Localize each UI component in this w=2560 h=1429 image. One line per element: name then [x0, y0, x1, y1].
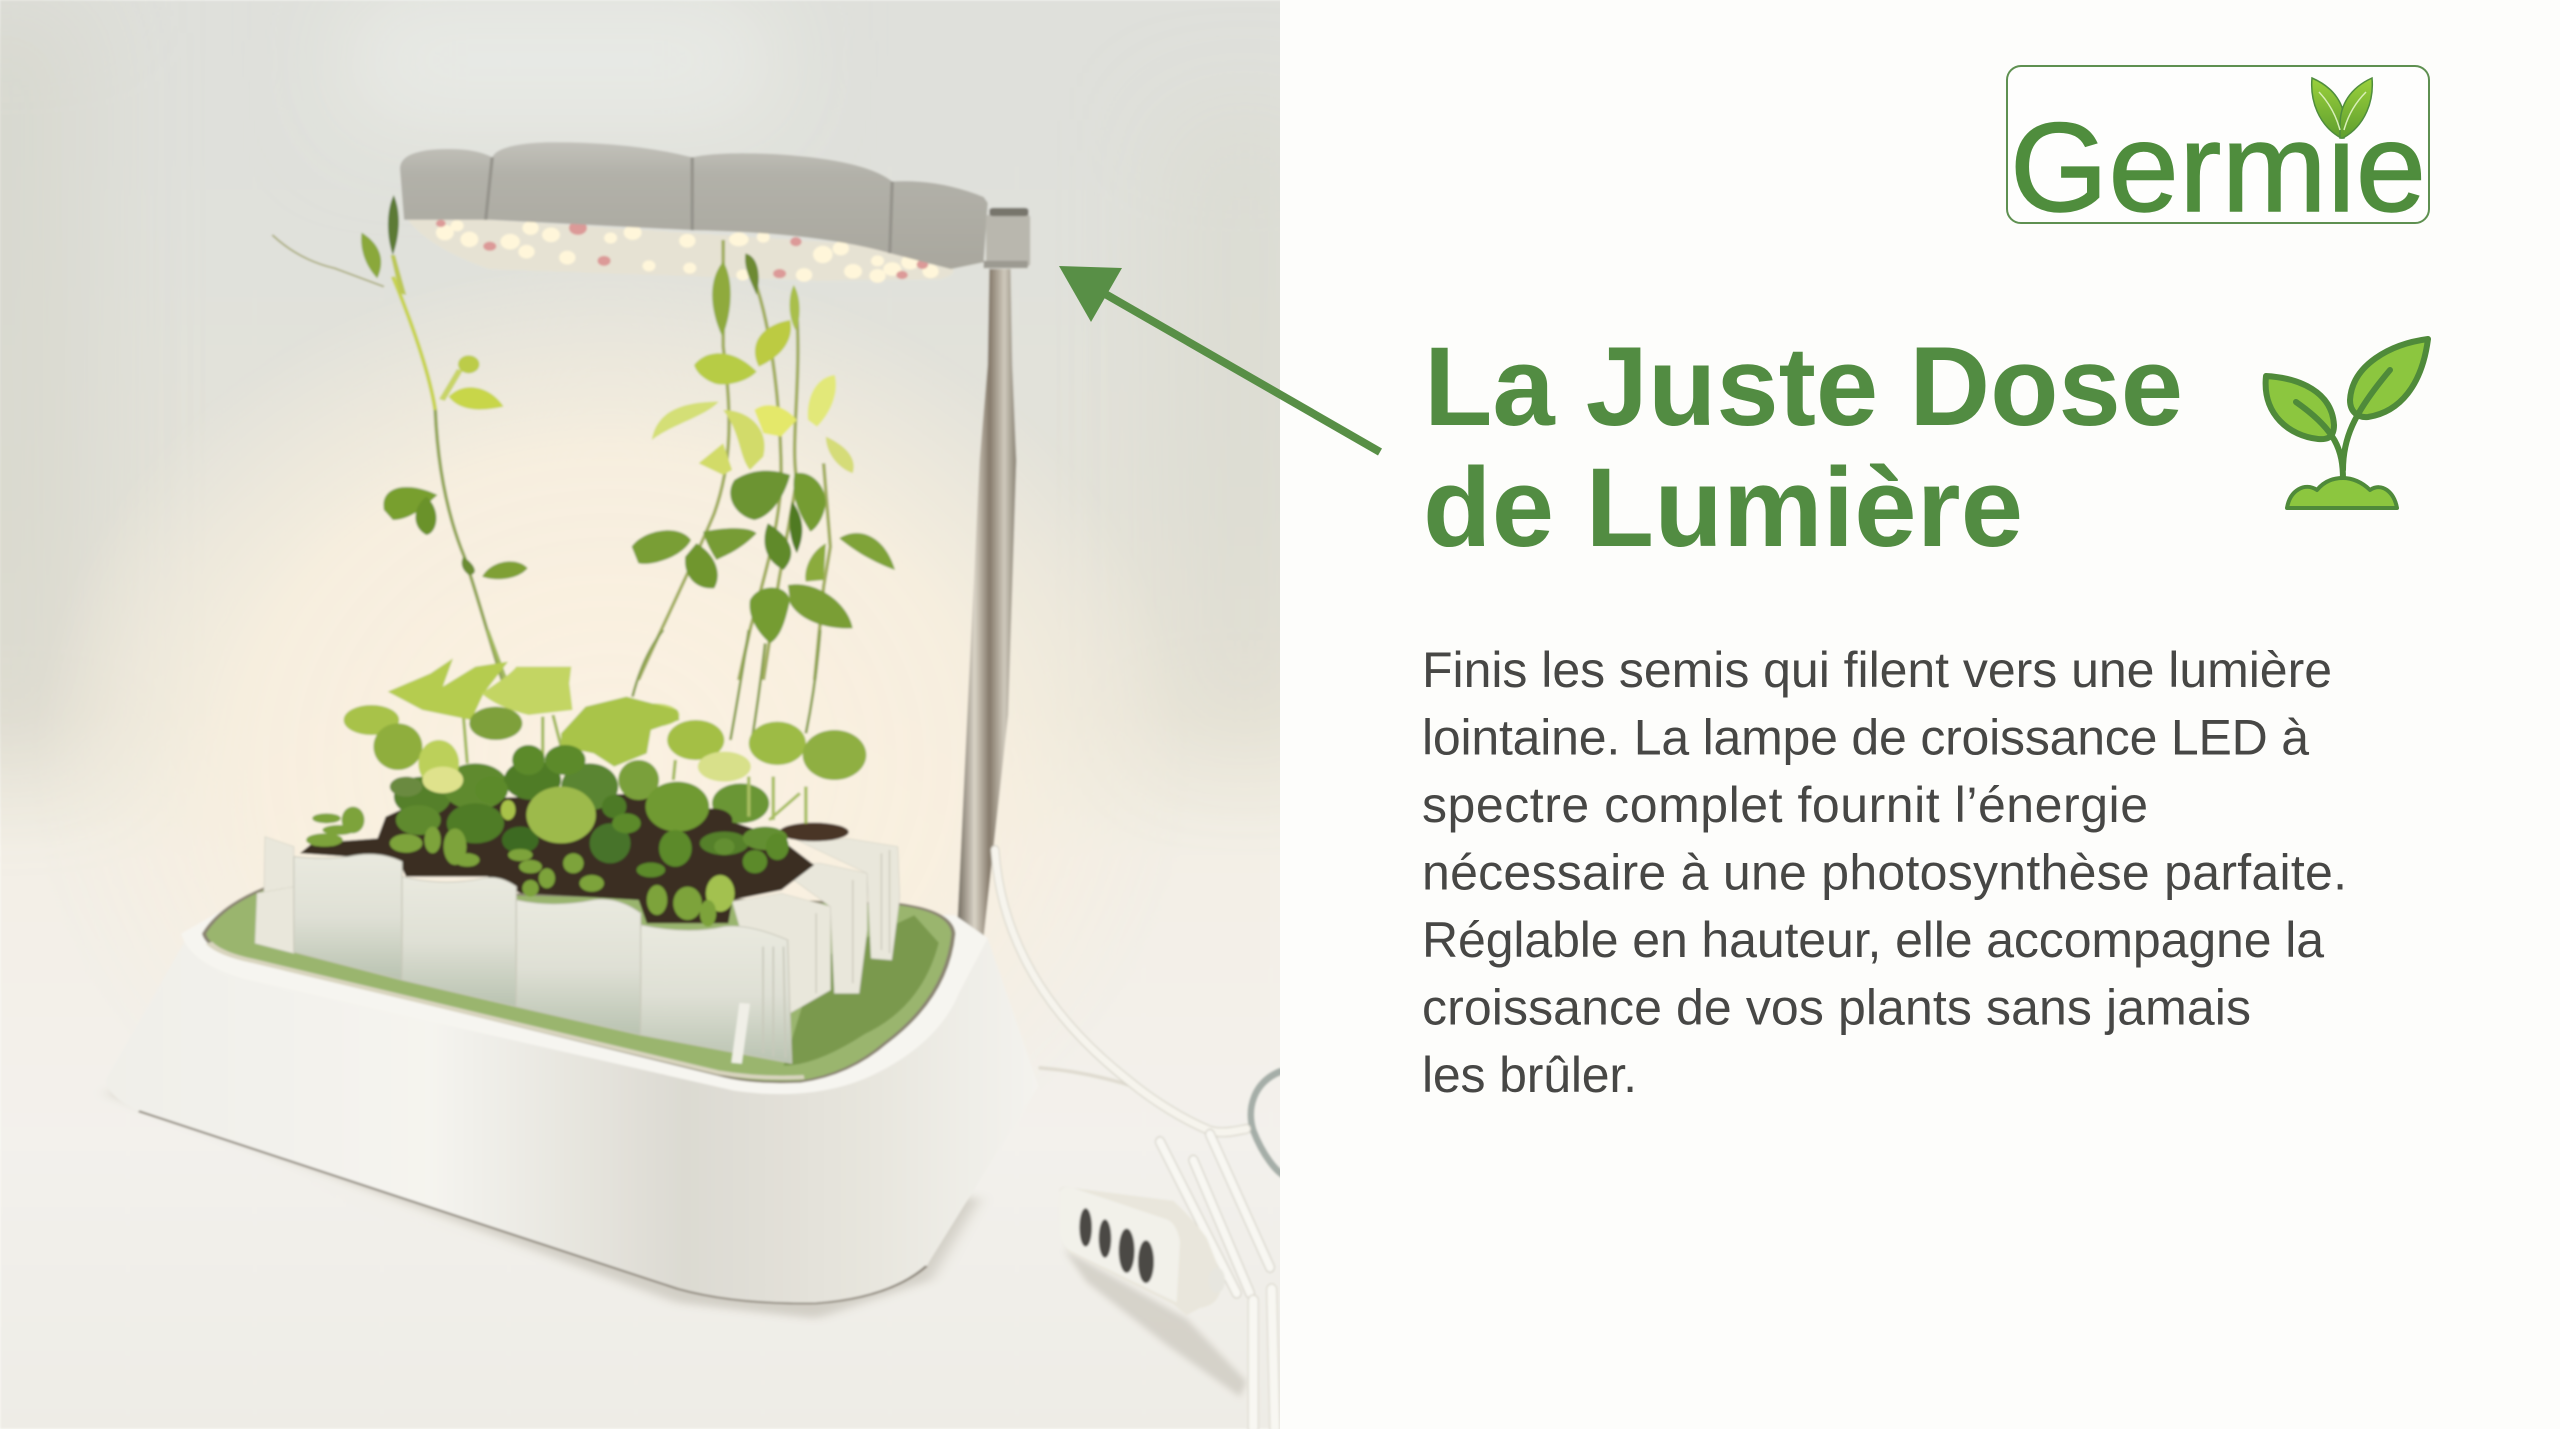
- body text: lointaine. La lampe de croissance LED à: [1422, 710, 2309, 766]
- back cells: [255, 837, 900, 1013]
- heading: [1423, 324, 2183, 570]
- front cells: [294, 854, 792, 1063]
- arrow pointing at the lamp: [1059, 266, 1380, 452]
- body text: croissance de vos plants sans jamais: [1422, 980, 2251, 1036]
- controller shadow: [1063, 1249, 1247, 1397]
- seedling cells and young plants: [255, 630, 900, 1063]
- logo wordmark: Germie: [2010, 97, 2426, 238]
- cell front ribs: [763, 947, 786, 1058]
- body text: les brûler.: [1422, 1047, 1637, 1103]
- cell ribs: [816, 850, 890, 993]
- body text: Finis les semis qui filent vers une lumière: [1422, 642, 2332, 698]
- power cable: [995, 850, 1283, 1429]
- logo leaves: [2312, 78, 2372, 138]
- floor shadow under the base: [106, 1079, 980, 1318]
- front seedlings: [306, 807, 789, 927]
- potting soil: [300, 793, 814, 923]
- lamp head and pole: [400, 142, 1030, 937]
- body text: spectre complet fournit l’énergie: [1422, 777, 2148, 833]
- sprout left leaf: [2266, 376, 2334, 439]
- lamp underside with LEDs: [404, 214, 953, 283]
- planter base and tray: [106, 888, 1038, 1318]
- lamp housing: [400, 142, 988, 269]
- backdrop fabric tones: [0, 0, 1320, 760]
- body text: Réglable en hauteur, elle accompagne la: [1422, 912, 2324, 968]
- heading: de Lumière: [1423, 445, 2023, 570]
- tall seedlings: [272, 195, 895, 680]
- photo backdrop: [0, 0, 1290, 1429]
- panel: right text column background: [1280, 0, 2560, 1429]
- body text: [1422, 642, 2347, 1103]
- base upper rim: [181, 897, 988, 1094]
- pole clamp: [984, 208, 1030, 268]
- body text: nécessaire à une photosynthèse parfaite.: [1422, 844, 2347, 900]
- icon: sprout: [2266, 339, 2428, 508]
- controller body: [1059, 1186, 1225, 1315]
- sprout right leaf: [2350, 339, 2428, 417]
- sprout stems: [2296, 370, 2390, 480]
- heading: La Juste Dose: [1424, 324, 2183, 449]
- telescopic pole: [957, 269, 1016, 937]
- logo: Germie: [2007, 66, 2429, 238]
- upper stems: [633, 630, 820, 747]
- warm light glow: [30, 260, 1190, 1260]
- right tall seedlings: [632, 240, 895, 680]
- green tray: [204, 888, 953, 1082]
- planter base: [106, 897, 1038, 1303]
- cable and remote controller: [995, 850, 1283, 1429]
- left tall seedling: [272, 195, 528, 680]
- back foliage: [344, 630, 866, 867]
- sprout soil: [2287, 478, 2397, 508]
- panel: product photo of the germination lamp: [0, 0, 1320, 1429]
